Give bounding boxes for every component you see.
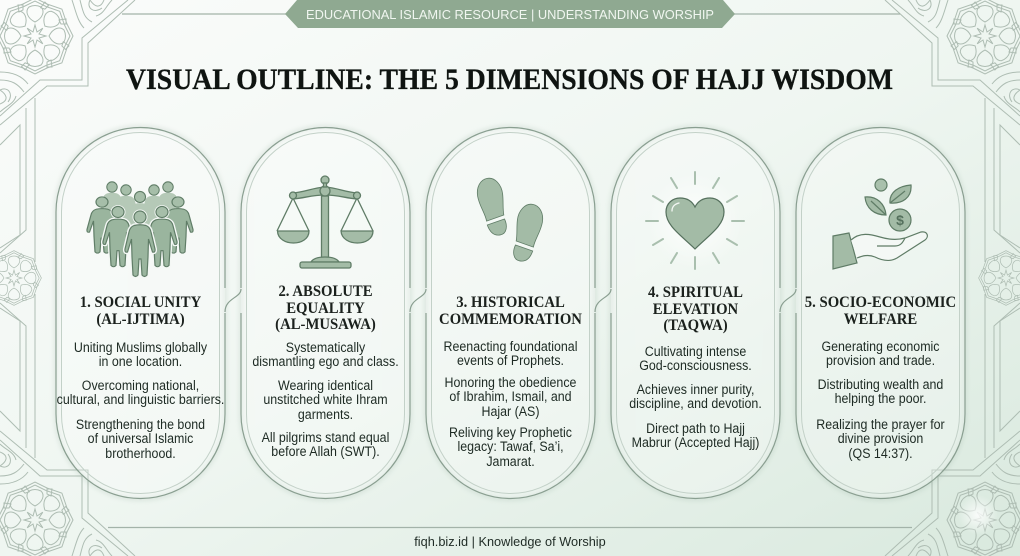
text: history 2 <box>445 375 576 419</box>
text: history 2: Hajar (AS) <box>482 404 539 419</box>
icon: hand with coins and leaves: $ <box>896 212 904 228</box>
text: welfare 2: Distributing wealth and <box>818 377 943 392</box>
text: taqwa 3: Mabrur (Accepted Hajj) <box>632 435 759 450</box>
text: history 1 <box>444 339 577 368</box>
text: equality 3: before Allah (SWT). <box>271 444 380 459</box>
text: history 3 <box>449 425 572 469</box>
heading: 4. SPIRITUAL <box>648 284 743 301</box>
text: welfare 1: Generating economic <box>821 339 940 354</box>
heading <box>80 294 201 328</box>
text: welfare 3 <box>816 417 945 461</box>
text: taqwa 1 <box>639 344 752 373</box>
heading <box>439 294 582 328</box>
text: history 2: of Ibrahim, Ismail, and <box>449 389 572 404</box>
text: history 2: Honoring the obedience <box>445 375 576 390</box>
heading: ELEVATION <box>653 301 738 318</box>
heading: WELFARE <box>844 311 917 328</box>
text: unity 3: brotherhood. <box>105 446 176 461</box>
text: equality 2: unstitched white Ihram <box>263 392 388 407</box>
text: unity 1 <box>74 340 207 369</box>
text: equality 1: dismantling ego and class. <box>252 354 399 369</box>
text: welfare 2 <box>818 377 943 406</box>
top banner: EDUCATIONAL ISLAMIC RESOURCE | UNDERSTANDING WORSHIP <box>306 7 714 22</box>
text: equality 2: garments. <box>298 407 353 422</box>
text: equality 3 <box>262 430 389 459</box>
text: welfare 1 <box>821 339 940 368</box>
text: history 3: legacy: Tawaf, Sa’i, <box>457 439 564 454</box>
heading: 5. SOCIO-ECONOMIC <box>805 294 956 311</box>
panel: absolute equality <box>252 175 399 459</box>
heading: (TAQWA) <box>663 317 728 334</box>
text: unity 1: in one location. <box>99 354 182 369</box>
icon: glowing heart <box>645 171 745 270</box>
text: unity 3: Strengthening the bond <box>76 417 205 432</box>
heading: COMMEMORATION <box>439 311 582 328</box>
heading: 2. ABSOLUTE <box>278 283 373 300</box>
text: unity 2: Overcoming national, <box>82 378 199 393</box>
text: welfare 2: helping the poor. <box>835 391 926 406</box>
text: taqwa 2: Achieves inner purity, <box>637 382 754 397</box>
text: history 1: Reenacting foundational <box>444 339 577 354</box>
panel: social unity <box>57 181 224 461</box>
text: unity 2: cultural, and linguistic barriers. <box>57 392 224 407</box>
text: taqwa 1: Cultivating intense <box>645 344 746 359</box>
heading <box>648 284 743 334</box>
text: unity 1: Uniting Muslims globally <box>74 340 207 355</box>
text: history 1: events of Prophets. <box>457 353 564 368</box>
text: equality 3: All pilgrims stand equal <box>262 430 389 445</box>
text: taqwa 2: discipline, and devotion. <box>629 396 762 411</box>
text: taqwa 3: Direct path to Hajj <box>646 421 745 436</box>
arch outlines <box>56 128 965 499</box>
text: welfare 3: Realizing the prayer for <box>816 417 945 432</box>
heading <box>805 294 956 328</box>
text: equality 2: Wearing identical <box>278 378 373 393</box>
icon: balance scale <box>276 175 374 269</box>
icon: group of people <box>86 181 194 278</box>
icon: hand with coins and leaves <box>832 178 928 270</box>
top banner <box>285 0 735 28</box>
text: taqwa 3 <box>632 421 759 450</box>
heading <box>275 283 376 333</box>
text: equality 2 <box>263 378 388 422</box>
arch shadows <box>56 127 965 499</box>
heading: EQUALITY <box>286 300 365 317</box>
panel: socio-economic welfare <box>805 178 956 461</box>
text: welfare 1: provision and trade. <box>826 353 935 368</box>
text: history 3: Reliving key Prophetic <box>449 425 572 440</box>
text: taqwa 1: God-consciousness. <box>639 358 752 373</box>
text: history 3: Jamarat. <box>486 454 535 469</box>
text: unity 3 <box>76 417 205 461</box>
text: unity 2 <box>57 378 224 407</box>
icon: footprints <box>476 178 544 262</box>
text: welfare 3: (QS 14:37). <box>848 446 913 461</box>
panel: spiritual elevation <box>629 171 762 450</box>
heading: (AL-MUSAWA) <box>275 316 376 333</box>
text: equality 1: Systematically <box>286 340 365 355</box>
text: welfare 3: divine provision <box>838 431 923 446</box>
panel: historical commemoration <box>439 178 582 469</box>
heading: (AL-IJTIMA) <box>96 311 185 328</box>
heading: 1. SOCIAL UNITY <box>80 294 201 311</box>
text: taqwa 2 <box>629 382 762 411</box>
footer: fiqh.biz.id | Knowledge of Worship <box>414 534 606 549</box>
text: unity 3: of universal Islamic <box>88 431 193 446</box>
heading: 3. HISTORICAL <box>456 294 565 311</box>
text: equality 1 <box>252 340 399 369</box>
